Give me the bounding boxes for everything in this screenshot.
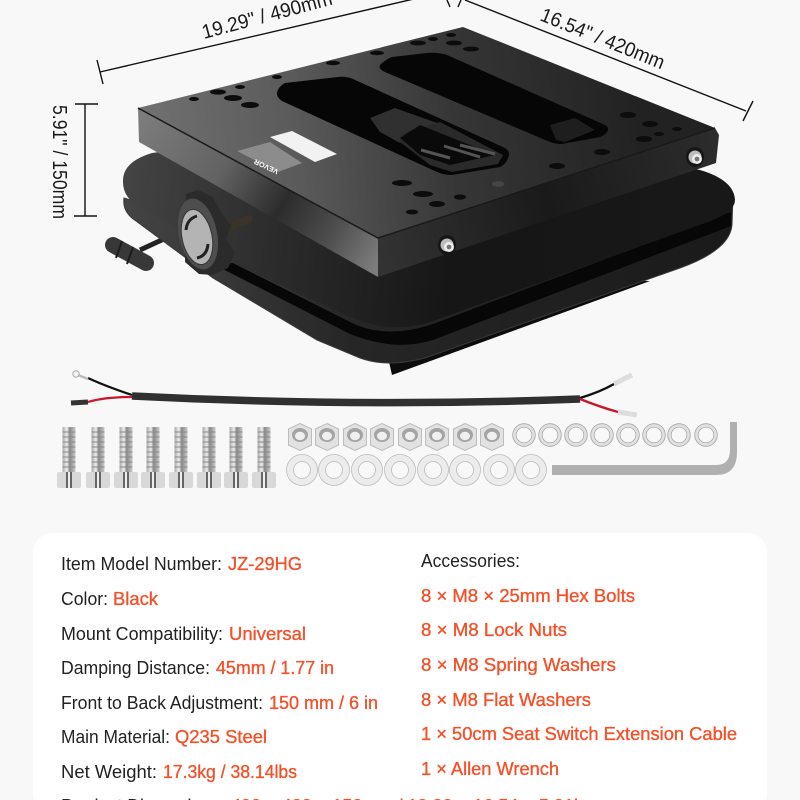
spec: color: Color:	[61, 589, 108, 609]
spec: main material: Q235 Steel	[175, 727, 267, 747]
shell shadow gap	[215, 212, 731, 345]
allen wrench	[552, 422, 737, 475]
plate bolts	[438, 147, 704, 255]
specifications panel	[33, 533, 767, 800]
spec: mount compatibility: Universal	[229, 624, 306, 644]
dimension: height 5.91 in / 150 mm	[48, 104, 98, 219]
spring washers	[513, 424, 717, 446]
spec: damping distance	[61, 658, 334, 678]
top plate front face	[138, 108, 378, 277]
hex bolts	[57, 427, 276, 488]
spec: main material: Main Material:	[61, 727, 170, 747]
adjustment knob	[172, 190, 249, 275]
accessory: flat washers: 8 × M8 Flat Washers	[421, 690, 591, 710]
spec: front to back adjustment	[61, 693, 378, 713]
extension cable	[71, 371, 637, 415]
flat washers	[286, 454, 546, 486]
accessories heading: Accessories:	[421, 551, 520, 571]
adjustment handle	[113, 238, 166, 264]
spec: mount compatibility: Mount Compatibility:	[61, 624, 223, 644]
accessory: lock nuts: 8 × M8 Lock Nuts	[421, 620, 567, 640]
dimension: depth 16.54 in / 420 mm	[447, 0, 753, 121]
spec: color: Black	[113, 589, 159, 609]
spec: main material	[61, 727, 267, 747]
spec: damping distance: 45mm / 1.77 in	[216, 658, 334, 678]
lock nuts	[288, 424, 504, 450]
accessory: allen wrench: 1 × Allen Wrench	[421, 759, 559, 779]
plate edges	[138, 108, 715, 238]
accessory: spring washers: 8 × M8 Spring Washers	[421, 655, 616, 675]
top plate right face	[378, 128, 719, 277]
spec: net weight	[61, 762, 297, 782]
product label	[237, 131, 337, 175]
bottom flap	[389, 280, 650, 375]
front window with mechanism	[277, 77, 509, 175]
top plate surface	[138, 27, 715, 238]
dimension: width 19.29 in / 490 mm	[97, 0, 418, 84]
spec: item model number: Item Model Number:	[61, 554, 222, 574]
upper cushion	[123, 120, 735, 327]
spec: mount compatibility	[61, 624, 306, 644]
dimension: height 5.91 in / 150 mm: 5.91" / 150mm	[48, 105, 70, 219]
spec: item model number: JZ-29HG	[228, 554, 302, 574]
accessory: extension cable: 1 × 50cm Seat Switch Extension Cable	[421, 724, 737, 744]
accessory: hex bolts: 8 × M8 × 25mm Hex Bolts	[421, 586, 635, 606]
spec: front to back adjustment: 150 mm / 6 in	[269, 693, 378, 713]
lower shell	[124, 195, 733, 363]
spec: color	[61, 589, 159, 609]
spec: net weight: Net Weight:	[61, 762, 157, 782]
spec: front to back adjustment: Front to Back Adjustment:	[61, 693, 263, 713]
dimension: depth 16.54 in / 420 mm: 16.54" / 420mm	[537, 4, 668, 74]
mounting holes	[189, 33, 682, 214]
seat suspension product	[113, 27, 735, 375]
product label: VEVOR	[253, 157, 280, 175]
spec: net weight: 17.3kg / 38.14lbs	[163, 762, 297, 782]
rear window	[380, 53, 608, 144]
spec: item model number	[61, 554, 302, 574]
spec: damping distance: Damping Distance:	[61, 658, 210, 678]
spec: product dimensions	[61, 796, 588, 800]
